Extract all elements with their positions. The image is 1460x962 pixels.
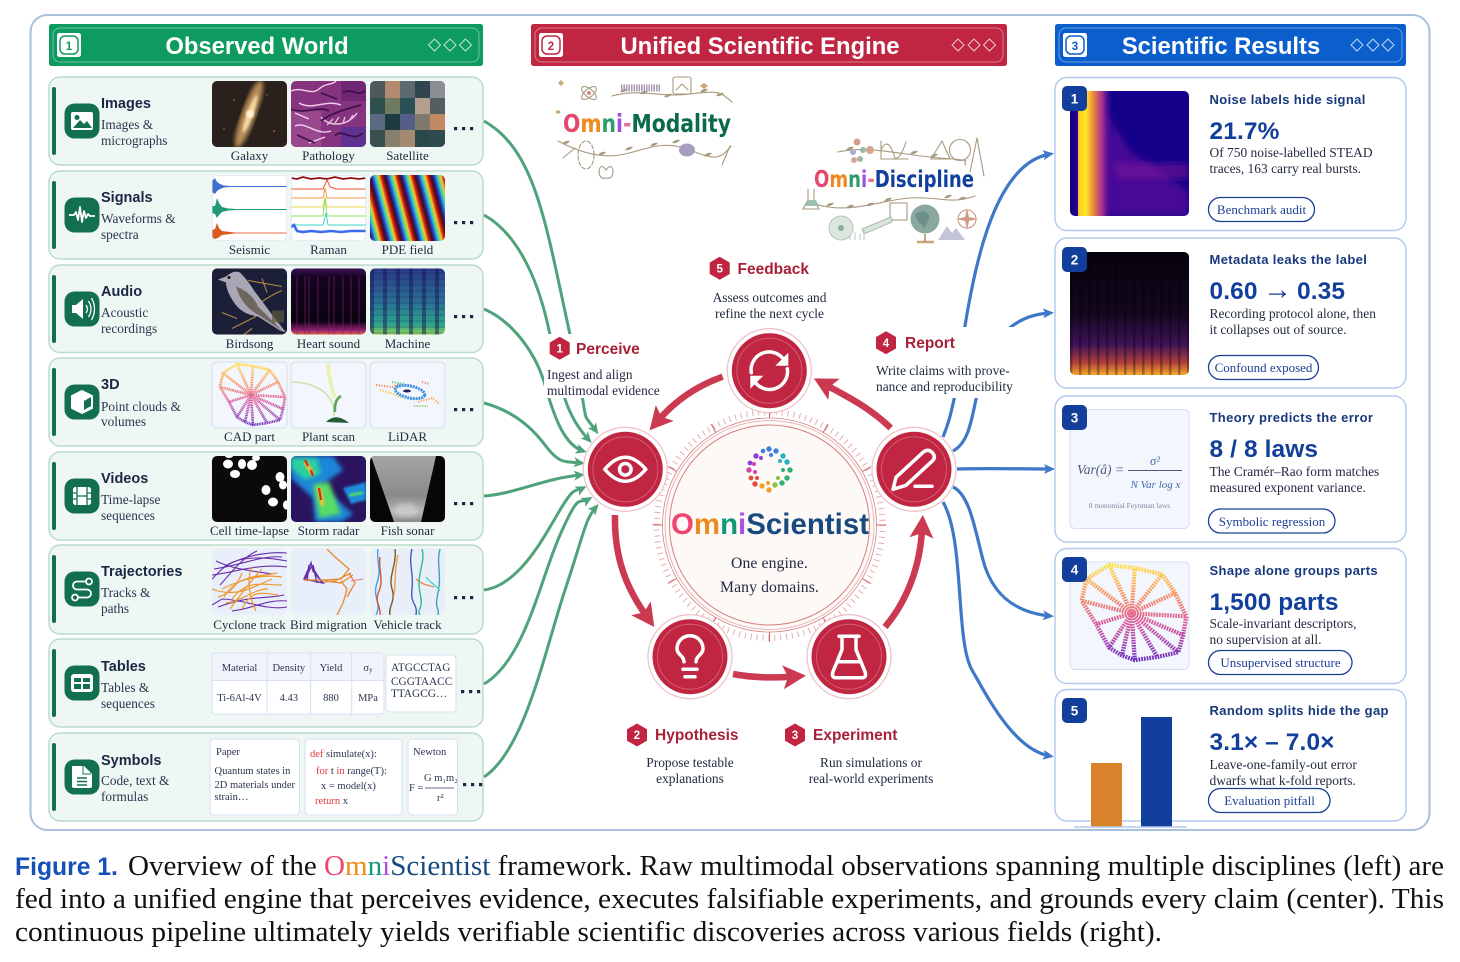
code card: for t in range(T): [316,766,387,777]
more indicator [454,315,473,318]
description: volumes [101,414,146,429]
figure caption [15,851,1444,948]
badge: 1 [1071,92,1079,106]
more indicator [454,408,473,411]
step: Hypothesis: Propose testable [646,755,734,770]
result card 2 [1055,238,1406,388]
panel header: Scientific Results [1055,24,1406,66]
description: paths [101,601,129,616]
spectrogram [1070,91,1189,216]
badge [1062,86,1087,111]
title: Noise labels hide signal [1210,92,1366,107]
metric: → [1263,274,1292,306]
step: Hypothesis [627,724,739,786]
metric: 21.7% [1210,118,1280,145]
description: Waveforms & [101,211,176,226]
captions [226,336,430,351]
icon: picture [64,104,100,138]
panel: Images row [49,77,483,165]
more indicator [454,596,473,599]
step: Hypothesis: explanations [656,771,724,786]
captions: Fish sonar [381,523,435,538]
captions: Bird migration [290,617,367,632]
description: formulas [101,789,148,804]
node: hypothesis bulb [648,615,732,699]
pill [1208,509,1335,533]
formula panel: 8 monomial Feynman laws [1089,501,1170,510]
thumbnail: cyclone track [212,549,287,615]
formula card: Newton [413,747,447,758]
icon: cube [64,384,100,420]
step: Perceive: Ingest and align [547,367,633,382]
pill: Confound exposed [1215,360,1313,375]
step: Report: nance and reproducibility [876,379,1013,394]
description: Tables & [101,680,149,695]
pill: Evaluation pitfall [1224,793,1315,808]
description: Time-lapse [101,492,160,507]
code card: return x [315,796,349,807]
step: Report: 4 [883,338,890,350]
paper card: Paper [216,747,240,758]
formula card [408,739,458,815]
step: Perceive: 1 [556,344,563,356]
metric: 0.35 [1297,278,1345,305]
pill [1208,788,1330,812]
captions: Cell time-lapse [210,523,289,538]
pill [1208,650,1352,674]
sequence card [386,655,456,712]
description: Of 750 noise-labelled STEAD [1210,145,1373,160]
figure caption: Overview of the OmniScientist framework. Raw multimodal observations spanning multiple disciplines (left) are [128,851,1444,882]
illustration: Omni-Modality doodle [555,77,732,178]
description: dwarfs what k-fold reports. [1210,773,1356,788]
panel: Audio row [49,265,483,352]
paper card: 2D materials under [214,780,295,791]
data table: σ [363,663,369,674]
captions: Heart sound [297,336,361,351]
connectors: green input curves [484,121,596,777]
result card 3 [1055,396,1406,542]
captions: Vehicle track [373,617,442,632]
data table: Ti-6Al-4V [217,693,262,704]
description: no supervision at all. [1210,632,1321,647]
data table: Material [222,663,257,674]
sequence card: ATGCCTAG [391,662,450,674]
formula card: r² [437,793,444,804]
thumbnail: PDE field [370,175,445,241]
panel: Videos row [49,452,483,540]
description: The Cramér–Rao form matches [1210,464,1379,479]
description: Recording protocol alone, then [1210,306,1376,321]
captions: Storm radar [298,523,360,538]
formula panel [1070,410,1189,528]
panel header: Unified Scientific Engine: Unified Scientific Engine [620,33,900,60]
formula card: G m₁m₂ [424,773,458,784]
description: sequences [101,696,155,711]
figure caption: fed into a unified engine that perceives evidence, executes falsifiable experiments, and grounds every claim (center). This [15,884,1444,915]
description: measured exponent variance. [1210,480,1366,495]
step: Hypothesis: Hypothesis [655,727,739,744]
captions: Seismic [229,242,270,257]
panel header: Scientific Results: Scientific Results [1122,33,1320,60]
badge: 3 [1071,410,1079,426]
step: Report: Report [905,335,955,352]
panel header: Unified Scientific Engine: 2 [548,41,554,53]
thumbnail: galaxy [212,78,287,150]
thumbnail: vehicle track [370,549,445,615]
data table [212,653,384,714]
illustration: Omni-Discipline doodle [803,138,984,242]
panel header: Unified Scientific Engine [531,24,1007,66]
step: Report: Write claims with prove- [876,363,1010,378]
captions: Raman [310,242,347,257]
panel: Tables row [49,639,483,727]
description: recordings [101,321,157,336]
step: Perceive: Perceive [576,341,640,358]
paper card: strain… [214,792,248,803]
thumbnail: plant scan [291,362,366,428]
code card [305,739,402,815]
step: Feedback [710,257,827,321]
spectrogram [1070,252,1189,375]
wordmark: Omni-Discipline: Omni-Discipline [814,167,974,193]
data table: Yield [320,663,343,674]
step: Perceive [544,334,664,398]
badge [1062,698,1087,723]
data table: Density [272,663,306,674]
thumbnail: seismic [212,175,287,241]
description: spectra [101,227,139,242]
captions: Machine [385,336,430,351]
thumbnail: cell time-lapse [212,454,289,522]
captions: LiDAR [388,429,427,444]
more indicator [461,690,480,693]
step: Report [872,327,1018,398]
panel header: Observed World: Observed World [165,33,349,60]
thumbnail: fish sonar [370,456,445,522]
pill [1208,356,1318,380]
thumbnail: LiDAR [370,362,445,428]
panel: 3D row [49,358,483,446]
logo: rainbow swirl [746,446,793,493]
result card 4 [1055,548,1406,684]
title: OmniScientist: OmniScientist [671,508,869,541]
node: perceive eye [583,427,667,511]
metric: 1,500 parts [1210,589,1339,616]
panel header: Observed World: 1 [66,41,73,53]
captions: Galaxy [231,148,269,163]
step: Experiment: real-world experiments [809,771,933,786]
label: Audio: Audio [101,284,142,300]
step: Experiment: Run simulations or [820,755,923,770]
description: Scale-invariant descriptors, [1210,616,1357,631]
icon: document [64,760,100,794]
title: Random splits hide the gap [1210,703,1389,718]
cycle arrows [615,377,922,677]
captions: CAD part [224,429,275,444]
icon: waveform [64,198,100,232]
formula card: F = [409,783,423,794]
title: Metadata leaks the label [1210,252,1367,267]
figure caption: continuous pipeline ultimately yields verifiable scientific discoveries across various fields (right). [15,917,1162,948]
panel header: Scientific Results: 3 [1072,41,1078,53]
code card: def simulate(x): [310,749,377,760]
description: sequences [101,508,155,523]
formula panel: Var(â) = [1077,462,1124,477]
step: Feedback: refine the next cycle [715,306,824,321]
step: Experiment: Experiment [813,727,897,744]
center dial [652,408,886,642]
data table: 880 [323,693,339,704]
label: Tables: Tables [101,659,146,675]
icon: film [64,478,100,514]
badge: 5 [1071,704,1079,718]
thumbnail: CAD part [212,362,287,428]
icon: speaker [64,292,100,326]
captions [213,617,442,632]
badge: 4 [1071,562,1079,578]
title: Theory predicts the error [1210,410,1373,425]
thumbnail: Raman [291,175,366,241]
result card 1 [1055,78,1406,230]
thumbnail: satellite [370,81,445,147]
step: Hypothesis: 2 [634,730,640,742]
pill [1208,198,1314,222]
thumbnail: bird migration [291,549,366,615]
description: traces, 163 carry real bursts. [1210,161,1361,176]
metric: 3.1× – 7.0× [1210,729,1335,756]
metric: 8 / 8 laws [1210,436,1318,463]
formula panel: σ² [1150,454,1160,468]
icon: table [64,666,100,700]
paper card: Quantum states in [214,766,291,777]
description: Acoustic [101,305,148,320]
result card 5 [1055,690,1406,827]
description: Tracks & [101,585,150,600]
step: Feedback: 5 [716,264,723,276]
panel: Signals row [49,171,483,259]
step: Experiment [785,724,933,786]
data table: y [369,666,373,674]
label: Images: Images [101,96,151,112]
icon: route [64,572,100,606]
more indicator [454,502,473,505]
more indicator [463,783,482,786]
captions [231,148,429,163]
thumbnail: machine [370,268,445,334]
more indicator [454,127,473,130]
label: Videos: Videos [101,471,148,487]
description: Code, text & [101,773,169,788]
label: Trajectories: Trajectories [101,564,182,580]
captions [224,429,427,444]
captions [210,523,435,538]
panel: Symbols row [49,733,483,821]
description: it collapses out of source. [1210,322,1346,337]
captions: Satellite [386,148,429,163]
pill: Benchmark audit [1217,202,1306,217]
panel: Trajectories row [49,545,483,634]
step: Experiment: 3 [792,730,798,742]
badge [1062,247,1087,272]
description: Leave-one-family-out error [1210,757,1357,772]
code card: x = model(x) [321,781,376,792]
label: 3D: 3D [101,377,120,393]
tagline: Many domains. [720,579,819,596]
badge [1062,557,1087,582]
captions: PDE field [382,242,434,257]
node: feedback refresh [727,329,811,413]
more indicator [454,221,473,224]
bar chart [1074,717,1187,827]
sequence card: TTAGCG… [391,688,447,700]
panel header: Observed World [49,24,483,66]
badge [1062,405,1087,430]
pill: Symbolic regression [1219,514,1326,529]
description: Images & [101,117,153,132]
node: report pen [872,427,956,511]
label: Symbols: Symbols [101,753,161,769]
step: Perceive: multimodal evidence [547,383,660,398]
data table: 4.43 [280,693,298,704]
wordmark: Omni-Modality: Omni-Modality [563,109,731,138]
captions: Plant scan [302,429,356,444]
sequence card: CGGTAACC [391,676,452,688]
thumbnail: birdsong [212,268,287,334]
data table: MPa [358,693,378,704]
step: Feedback: Assess outcomes and [713,290,827,305]
label: Signals: Signals [101,190,153,206]
title: Shape alone groups parts [1210,563,1378,578]
badge: 2 [1071,252,1078,268]
connectors: blue output curves [943,154,1051,756]
thumbnail: storm radar [291,456,366,522]
step: Feedback: Feedback [738,261,809,278]
tagline: One engine. [731,555,808,572]
paper card [210,739,300,815]
metric: 0.60 [1210,278,1258,305]
pill: Unsupervised structure [1220,655,1341,670]
captions [229,242,434,257]
figure caption: Figure 1. [15,854,118,881]
description: Point clouds & [101,399,181,414]
captions: Pathology [302,148,355,163]
captions: Cyclone track [213,617,286,632]
thumbnail: pathology [291,81,366,147]
formula panel: N Var log x [1130,479,1181,491]
captions: Birdsong [226,336,274,351]
node: experiment flask [807,615,891,699]
thumbnail: heart sound [291,268,366,334]
description: micrographs [101,133,167,148]
point cloud panel [1070,562,1189,670]
